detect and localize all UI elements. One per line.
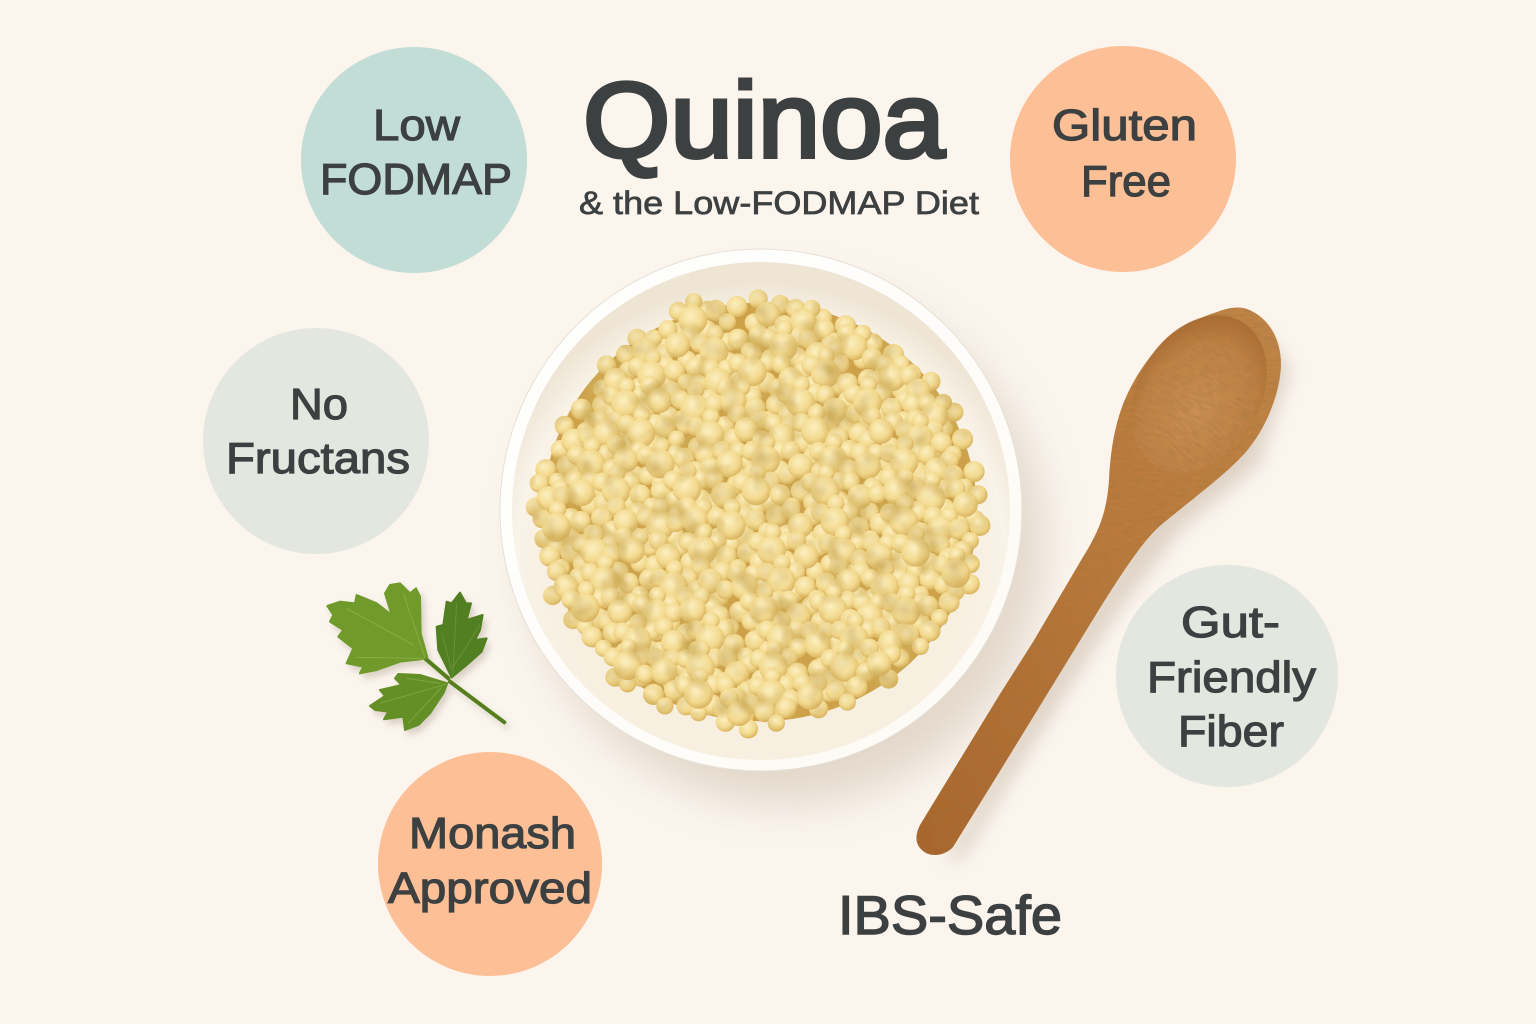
large parsley leaf: [327, 583, 427, 673]
bowl of quinoa: [500, 249, 1043, 803]
badge: Monash Approved: Approved: [388, 864, 592, 913]
parsley stem: [425, 658, 504, 722]
quinoa grains: [526, 289, 990, 739]
title: [579, 60, 979, 221]
spoon shadow: [945, 330, 1290, 860]
badge: Gut-Friendly Fiber: Gut-: [1181, 598, 1280, 647]
badge: Low FODMAP: Low: [373, 101, 460, 150]
badge: Low FODMAP: FODMAP: [320, 155, 512, 204]
label: IBS-Safe: IBS-Safe: [838, 884, 1062, 946]
badge: Gluten Free: [1010, 46, 1236, 272]
badge: Gut-Friendly Fiber: Fiber: [1178, 707, 1284, 756]
badge: Gluten Free: Free: [1081, 157, 1171, 206]
badge: Monash Approved: Monash: [409, 809, 576, 858]
badge: Low FODMAP: [301, 47, 527, 273]
badge: Gut-Friendly Fiber: [1116, 565, 1338, 787]
title: & the Low-FODMAP Diet: [579, 185, 979, 221]
title: Quinoa: [583, 60, 946, 180]
wooden spoon: [916, 291, 1295, 860]
badge: Monash Approved: [378, 752, 602, 976]
bowl rim: [500, 249, 1022, 771]
badge: Gluten Free: Gluten: [1052, 101, 1197, 150]
spoon scoop: [1103, 291, 1295, 497]
bowl shadow: [527, 287, 1043, 803]
lower parsley leaf: [370, 674, 447, 730]
badge: No Fructans: Fructans: [226, 434, 410, 483]
badge: No Fructans: No: [290, 380, 348, 429]
right parsley leaf: [437, 593, 487, 677]
spoon body: [916, 308, 1281, 855]
badge: Gut-Friendly Fiber: Friendly: [1147, 653, 1316, 702]
bowl interior: [512, 262, 1010, 760]
badge: No Fructans: [203, 328, 429, 554]
parsley sprig: [327, 583, 504, 730]
